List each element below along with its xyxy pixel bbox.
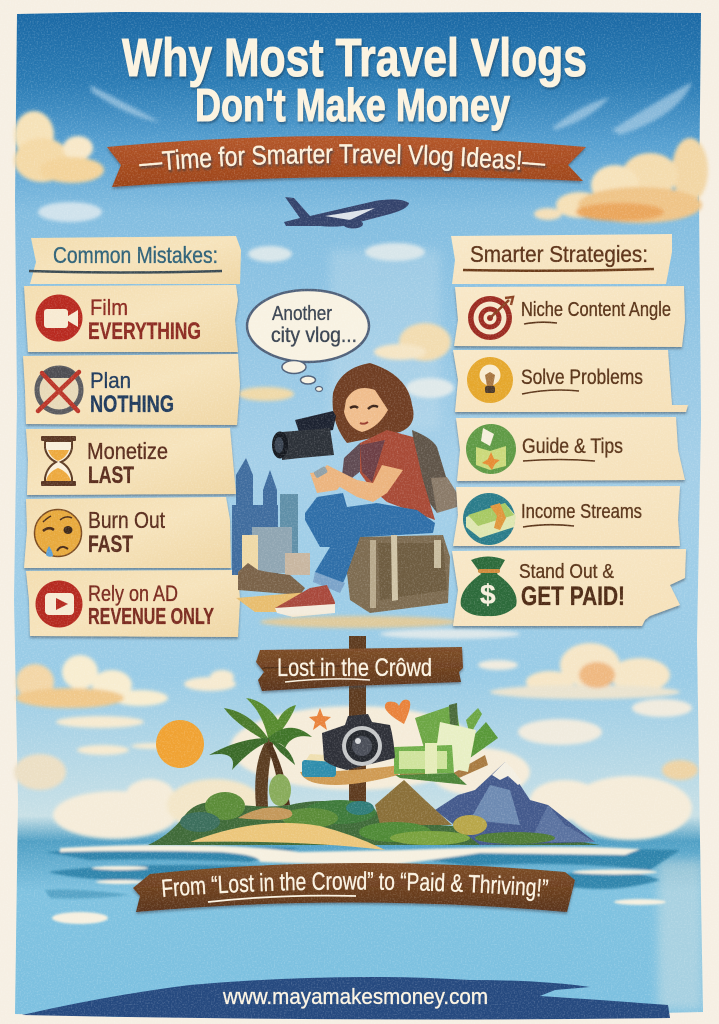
cloud: by bubble (374, 323, 451, 361)
website footer band (22, 977, 670, 1019)
shelf with camera, luggage and cash (300, 703, 498, 785)
row: burn out fast (24, 497, 231, 568)
hill: brown (375, 780, 452, 825)
header: common mistakes: Common Mistakes: (53, 242, 218, 268)
row: burn out fast: Burn Out (88, 507, 166, 533)
row: monetize last: Monetize (87, 438, 168, 464)
shirt (342, 430, 435, 520)
star and heart (309, 700, 410, 730)
row: film everything (24, 285, 238, 352)
mountain: blue (435, 762, 595, 845)
sun (156, 720, 204, 768)
icon: video camera (36, 294, 82, 342)
cash fan (394, 703, 498, 785)
icon: hourglass (41, 436, 76, 486)
row: rely on ad revenue: Rely on AD (88, 581, 178, 606)
wooden banner: from lost to paid (132, 863, 576, 916)
row: burn out fast: FAST (88, 531, 133, 558)
header: smarter strategies: Smarter Strategies: (470, 241, 648, 267)
row: solve problems (453, 350, 688, 412)
panel: common mistakes (23, 236, 241, 637)
character: woman with camera on suitcase (272, 363, 457, 617)
icon: money bag (461, 556, 517, 616)
cloud band near horizon (14, 706, 692, 840)
wooden banner: from lost to paid: From “Lost in the Crowd” to “Paid & Thriving!” (162, 871, 548, 902)
jeans (305, 493, 435, 593)
city skyline (232, 458, 310, 612)
row: guide and tips (456, 417, 685, 481)
wisps top (90, 82, 692, 135)
row: monetize last: LAST (88, 462, 134, 489)
website footer band: www.mayamakesmoney.com (222, 984, 488, 1009)
row: monetize last (26, 428, 236, 495)
icon: light bulb (467, 357, 513, 403)
ribbon subtitle: —Time for Smarter Travel Vlog Ideas!— (139, 144, 548, 174)
header: common mistakes (29, 236, 241, 284)
cloud: top left (14, 111, 104, 183)
ribbon subtitle (106, 136, 586, 190)
row: stand out and get paid: Stand Out & (519, 561, 615, 583)
row: rely on ad revenue: REVENUE ONLY (88, 603, 214, 629)
sand (190, 807, 385, 850)
face (344, 388, 388, 432)
row: niche content angle (454, 286, 685, 347)
icon: money bag: $ (480, 579, 496, 610)
camera (322, 714, 395, 770)
row: niche content angle: Niche Content Angle (521, 299, 671, 321)
arms (310, 465, 403, 502)
icon: map guide (466, 424, 516, 474)
row: film everything: EVERYTHING (88, 318, 201, 345)
backpack (412, 430, 457, 513)
title: Why Most Travel Vlogs (122, 28, 587, 88)
camera (272, 411, 336, 460)
sea foam and waves (45, 845, 680, 924)
shoe (275, 585, 335, 617)
cloud: lower right (490, 643, 680, 699)
row: plan nothing: NOTHING (90, 391, 174, 418)
icon: airplane (284, 197, 409, 228)
island (148, 762, 600, 850)
row: stand out and get paid (452, 549, 686, 626)
cloud: lower left (16, 655, 168, 708)
thought bubble: Another (272, 303, 332, 325)
row: guide and tips: Guide & Tips (522, 435, 623, 458)
icon: stack of cash (463, 493, 516, 545)
icon: sad emoji (34, 510, 82, 557)
cloud: right (534, 138, 708, 223)
row: rely on ad revenue (26, 570, 240, 637)
row: stand out and get paid: GET PAID! (521, 581, 625, 611)
row: solve problems: Solve Problems (521, 366, 643, 389)
signpost (349, 636, 366, 816)
row: plan nothing: Plan (90, 368, 131, 393)
hair (333, 363, 414, 443)
title (122, 28, 587, 131)
teal bag (302, 754, 336, 777)
palm tree (209, 698, 312, 807)
row: income streams (453, 486, 680, 546)
wooden sign: lost in the crowd: Lost in the Crôwd (277, 654, 432, 682)
row: income streams: Income Streams (521, 501, 642, 523)
header: smarter strategies (451, 234, 672, 284)
icon: target (468, 296, 513, 340)
thought bubble: city vlog... (271, 324, 357, 347)
panel: smarter strategies (451, 234, 688, 626)
row: plan nothing (23, 354, 240, 425)
foliage (180, 774, 555, 845)
icon: play button (36, 580, 82, 628)
clouds (14, 82, 708, 840)
cloud: near plane (248, 243, 425, 262)
thought bubble (247, 290, 369, 392)
icon: crossed out calendar (37, 367, 81, 412)
title: Don't Make Money (195, 79, 510, 131)
ground shadow (260, 616, 520, 639)
suitcase (347, 535, 450, 613)
row: film everything: Film (90, 295, 128, 320)
wooden sign: lost in the crowd (256, 647, 463, 691)
